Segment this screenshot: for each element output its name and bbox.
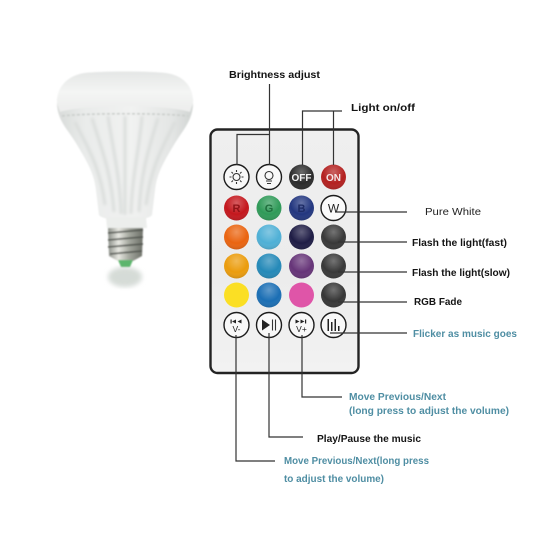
button: white: W xyxy=(328,202,340,216)
button: brightness down xyxy=(224,164,249,190)
label: brightness adjust: Brightness adjust xyxy=(229,69,321,81)
green contact tip xyxy=(118,260,133,267)
bulb body xyxy=(57,72,193,220)
button: navy xyxy=(289,224,314,250)
button: orange-red xyxy=(224,224,249,250)
remote control xyxy=(210,130,358,373)
button: flash fast xyxy=(321,224,346,250)
button: pink xyxy=(289,282,314,308)
button: red: R xyxy=(233,203,241,215)
remote body xyxy=(210,130,358,373)
label: move previous/next, right: (long press to adjust the volume) xyxy=(349,405,509,417)
button: light blue xyxy=(256,224,282,250)
row 2 buttons xyxy=(224,196,346,220)
button: amber xyxy=(224,254,249,278)
bulb screw base xyxy=(108,228,143,261)
bulb seam xyxy=(62,114,188,116)
button: blue xyxy=(256,282,282,308)
label: move previous/next, right: Move Previous/Next xyxy=(349,391,446,403)
bulb reflection xyxy=(108,267,142,287)
bulb dome xyxy=(57,72,193,112)
button: play and pause xyxy=(256,312,282,338)
label: RGB fade: RGB Fade xyxy=(414,296,462,308)
connector lines xyxy=(236,84,407,461)
row 3 buttons xyxy=(224,224,346,250)
button: previous and volume down: V- xyxy=(232,324,241,334)
row 5 buttons xyxy=(224,282,346,308)
row 4 buttons xyxy=(224,254,346,278)
row 6 buttons xyxy=(224,312,346,338)
button: brightness up xyxy=(256,164,282,190)
label: flash fast: Flash the light(fast) xyxy=(412,237,507,249)
icon: LED bulb xyxy=(57,72,193,287)
button: green: G xyxy=(265,203,273,215)
button: flash slow xyxy=(321,254,346,278)
label: move previous/next, right xyxy=(349,391,509,417)
row 1 buttons xyxy=(224,164,346,190)
button: on: ON xyxy=(326,173,341,184)
label: play/pause the music: Play/Pause the music xyxy=(317,433,421,445)
button: blue: B xyxy=(298,203,306,215)
button: teal blue xyxy=(256,254,282,278)
label: move previous/next, left: to adjust the volume) xyxy=(284,473,384,485)
button: purple xyxy=(289,254,314,278)
button: music flicker xyxy=(321,312,346,338)
button: off: OFF xyxy=(292,173,312,184)
screw threads xyxy=(108,230,143,254)
label: flash slow: Flash the light(slow) xyxy=(412,267,510,279)
label: move previous/next, left: Move Previous/Next(long press xyxy=(284,455,429,467)
bulb collar xyxy=(106,217,147,228)
label: move previous/next, left xyxy=(284,455,429,485)
button: fade xyxy=(321,282,346,308)
label: pure white: Pure White xyxy=(425,206,481,218)
button: next and volume up: V+ xyxy=(296,324,307,334)
label: flicker as music goes: Flicker as music goes xyxy=(413,328,517,340)
button: yellow xyxy=(224,282,249,308)
bulb ribs xyxy=(75,116,175,215)
label: light on/off: Light on/off xyxy=(351,102,416,114)
